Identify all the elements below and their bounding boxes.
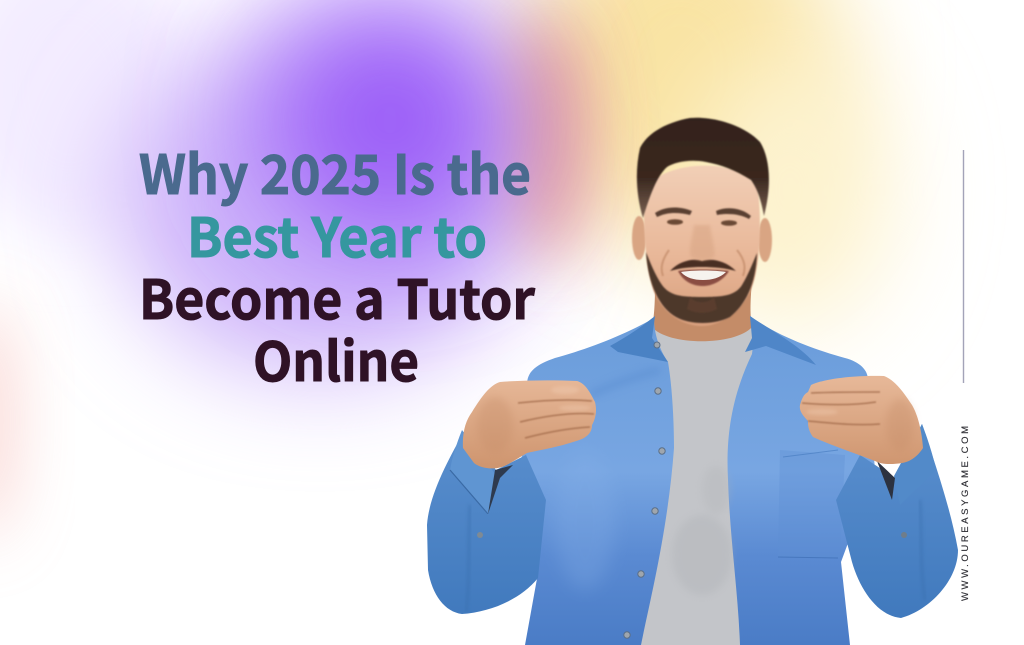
face <box>644 166 760 326</box>
mouth <box>678 270 729 286</box>
left sleeve <box>427 428 546 614</box>
icon: blue shirt body <box>520 316 875 645</box>
website text: WWW.OUREASYGAME.COM <box>960 426 971 601</box>
vertical divider line <box>962 150 964 383</box>
title line 2: Best Year to <box>187 194 487 273</box>
shirt collars <box>610 316 816 365</box>
eyes <box>667 219 683 225</box>
hair <box>637 118 769 218</box>
title <box>139 131 535 397</box>
right hand <box>800 376 923 464</box>
moustache <box>670 260 736 271</box>
right sleeve <box>836 424 958 618</box>
title line 3: Become a Tutor <box>139 256 535 335</box>
beard <box>646 252 757 323</box>
ears <box>632 216 646 260</box>
icon: t-shirt <box>636 322 760 645</box>
head <box>632 118 772 326</box>
lower lip patch <box>687 297 717 313</box>
t-shirt stains <box>672 466 732 595</box>
eyebrows <box>655 207 692 217</box>
man illustration <box>427 118 958 645</box>
title line 1: Why 2025 Is the <box>139 131 531 210</box>
shirt buttons <box>624 342 665 638</box>
smile lines <box>662 250 669 276</box>
left hand <box>463 380 596 468</box>
nose <box>690 225 715 260</box>
neck <box>652 280 752 341</box>
title line 4: Online <box>253 318 419 397</box>
